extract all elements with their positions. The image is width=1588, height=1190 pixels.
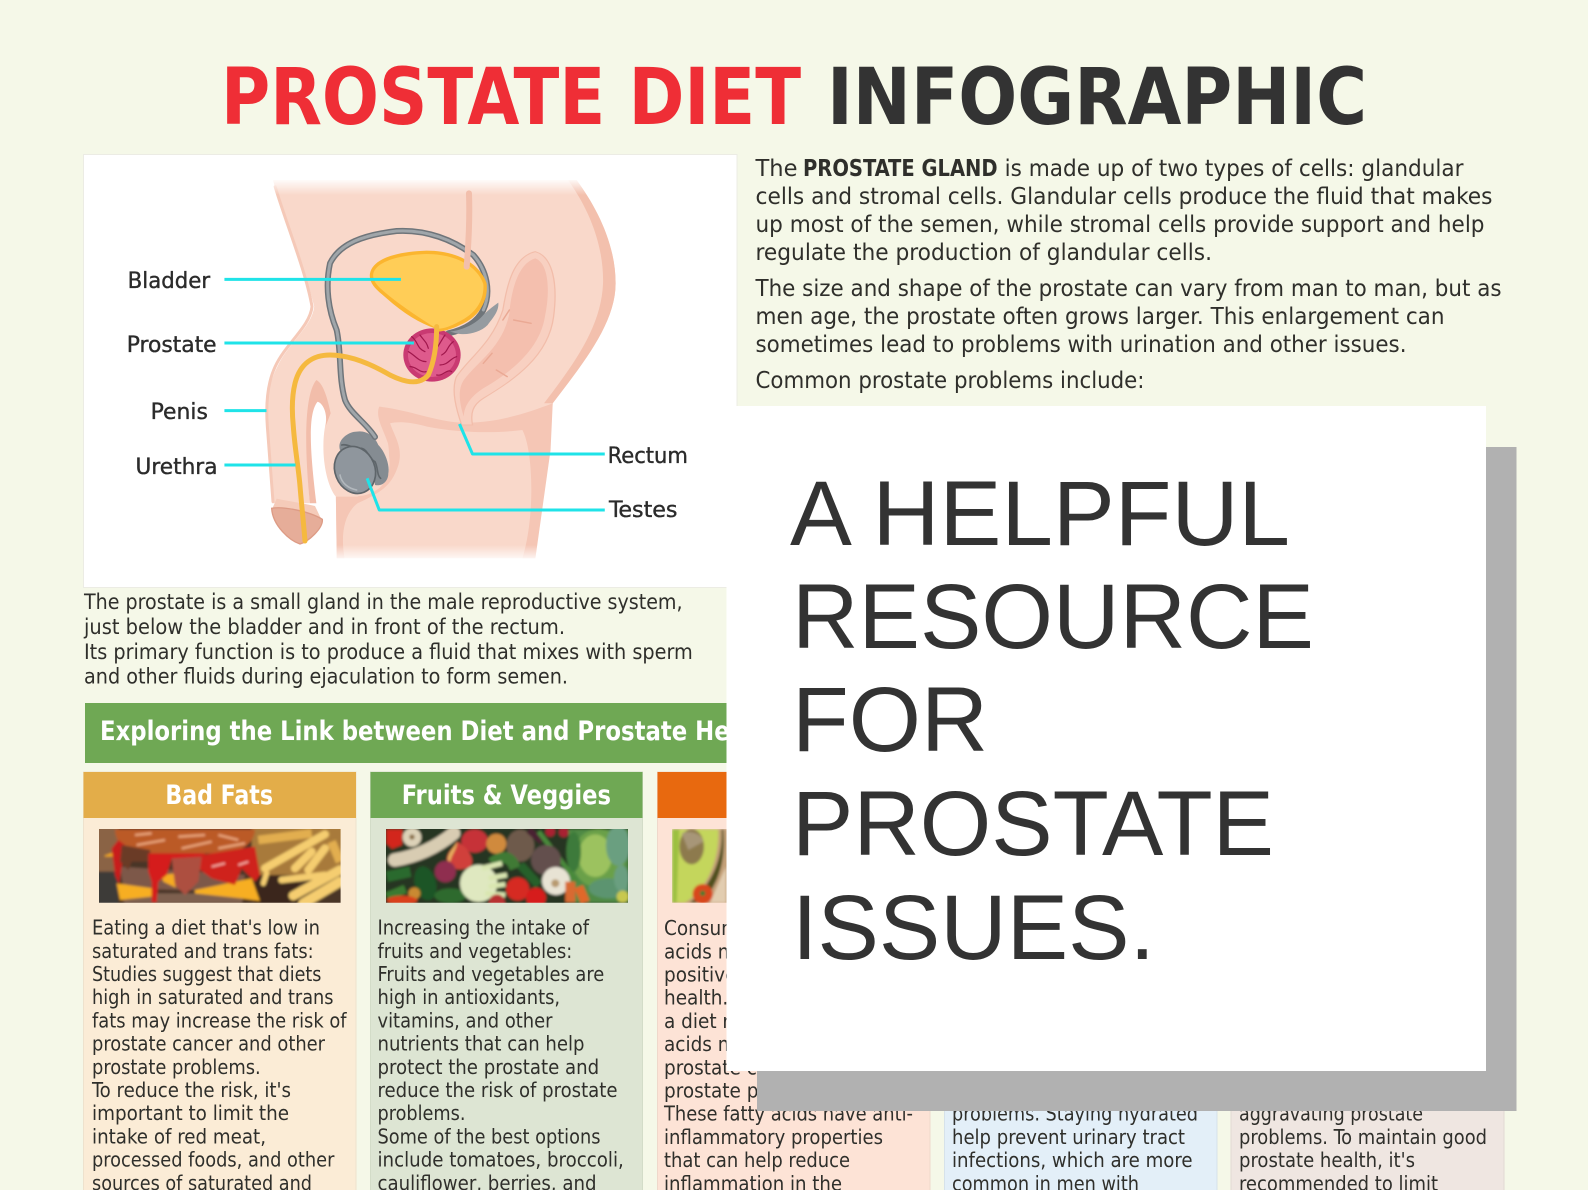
text: aggravating foods advice: aggravating prostate: [1239, 1102, 1423, 1126]
text: fatty acids advice: inflammatory properties: [664, 1125, 883, 1149]
text: bad fats advice: saturated and trans fats:: [92, 939, 314, 963]
text: fatty acids advice: These fatty acids have anti-: [663, 1102, 913, 1126]
labels: Urethra: [136, 455, 218, 480]
text block: prostate gland details: Common prostate problems include:: [756, 368, 1144, 394]
text: hydration advice: infections, which are more: [952, 1148, 1193, 1172]
text: bad fats advice: prostate cancer and other: [92, 1032, 325, 1056]
text: bad fats advice: processed foods, and other: [92, 1148, 335, 1172]
overlay card: helpful resource headline: [726, 406, 1486, 1071]
title: [221, 53, 1367, 143]
text: fatty acids advice: health.: [664, 986, 728, 1010]
overlay card: helpful resource headline: RESOURCE: [792, 566, 1314, 668]
panel: aggravating foods: [1231, 1000, 1504, 1190]
panel: anatomy diagram: [84, 154, 737, 588]
text block: prostate description: The prostate is a small gland in the male reproductive system,: [83, 590, 683, 615]
text: hydration advice: problems. Staying hydrated: [952, 1102, 1198, 1126]
panel: bad fats: Bad Fats: [165, 780, 273, 811]
text: fruits and vegetables advice: include tomatoes, broccoli,: [378, 1148, 624, 1172]
text: fruits and vegetables advice: reduce the risk of prostate: [378, 1078, 618, 1102]
panel: fruits and veggies: Fruits & Veggies: [402, 780, 611, 811]
image: burger and fries: [99, 829, 341, 903]
image: avocado and bread: [672, 829, 726, 903]
text: fatty acids advice: [663, 916, 913, 1190]
illustration: male reproductive anatomy: [266, 178, 616, 562]
text block: prostate gland details: up most of the semen, while stromal cells provide support and help: [756, 212, 1484, 238]
text: fruits and vegetables advice: problems.: [378, 1101, 466, 1125]
overlay card: helpful resource headline: A HELPFUL: [790, 463, 1290, 565]
panel: bad fats: [84, 772, 356, 1190]
text: bad fats advice: intake of red meat,: [92, 1124, 266, 1148]
text: fruits and vegetables advice: fruits and vegetables:: [378, 939, 572, 963]
text: bad fats advice: Eating a diet that's low in: [92, 915, 320, 939]
text: bad fats advice: important to limit the: [92, 1101, 289, 1125]
text: fruits and vegetables advice: Increasing the intake of: [378, 915, 590, 939]
text: aggravating foods advice: prostate health, it's: [1239, 1148, 1415, 1172]
text: bad fats advice: high in saturated and trans: [92, 985, 334, 1009]
title: PROSTATE DIET: [221, 53, 801, 143]
bladder, prostate and ducts: [292, 193, 498, 541]
text: bad fats advice: prostate problems.: [92, 1055, 261, 1079]
labels: Prostate: [127, 333, 217, 358]
text block: prostate gland details: is made up of two types of cells: glandular: [1005, 156, 1464, 182]
text: bad fats advice: fats may increase the risk of: [92, 1008, 347, 1032]
overlay card: helpful resource headline: ISSUES.: [792, 877, 1155, 979]
text: fruits and vegetables advice: Some of the best options: [378, 1124, 600, 1148]
text: aggravating foods advice: [1239, 1102, 1487, 1190]
penis tip and testis: [272, 430, 390, 544]
text: aggravating foods advice: problems. To maintain good: [1239, 1125, 1487, 1149]
labels: Testes: [608, 498, 678, 523]
text: fatty acids advice: acids may: [664, 1032, 758, 1056]
text: fruits and vegetables advice: nutrients that can help: [378, 1032, 584, 1056]
labels: Penis: [151, 400, 208, 425]
text: fatty acids advice: that can help reduce: [664, 1148, 850, 1172]
text block: prostate gland details: cells and stromal cells. Glandular cells produce the fluid that makes: [756, 184, 1492, 210]
panel: healthy fats: [658, 772, 930, 1190]
text: bad fats advice: [91, 915, 347, 1190]
text: fatty acids advice: prostate p: [664, 1078, 758, 1102]
text: fatty acids advice: prostate c: [664, 1055, 757, 1079]
text: fatty acids advice: Consuming: [664, 916, 768, 940]
text block: prostate description: and other fluids during ejaculation to form semen.: [84, 664, 568, 690]
text: fruits and vegetables advice: Fruits and vegetables are: [378, 962, 604, 986]
labels: [127, 269, 688, 523]
text block: prostate gland details: PROSTATE GLAND: [803, 156, 998, 182]
text block: prostate description: [83, 590, 693, 690]
text block: prostate gland details: sometimes lead to problems with urination and other issues.: [756, 332, 1406, 358]
text block: prostate gland details: men age, the prostate often grows larger. This enlargement can: [756, 304, 1444, 330]
overlay card: helpful resource headline: FOR: [792, 669, 988, 771]
text: bad fats advice: To reduce the risk, it's: [91, 1078, 291, 1102]
text block: prostate description: Its primary function is to produce a fluid that mixes with sperm: [84, 640, 693, 665]
image: mixed vegetables: [386, 829, 628, 903]
text: fruits and vegetables advice: high in antioxidants,: [378, 985, 560, 1009]
labels: Rectum: [608, 444, 688, 469]
banner: diet and prostate health: [85, 703, 1504, 763]
overlay shadow: [757, 447, 1516, 1111]
text: bad fats advice: Studies suggest that diets: [92, 962, 321, 986]
text: fruits and vegetables advice: vitamins, and other: [378, 1008, 553, 1032]
title: INFOGRAPHIC: [827, 53, 1367, 143]
text block: prostate gland details: The size and shape of the prostate can vary from man to man, but as: [754, 276, 1502, 302]
panel: hydration: [944, 1000, 1217, 1190]
text: fruits and vegetables advice: [378, 915, 624, 1190]
text block: prostate description: just below the bladder and in front of the rectum.: [83, 615, 565, 640]
text: fruits and vegetables advice: protect the prostate and: [378, 1055, 599, 1079]
text block: prostate gland details: regulate the production of glandular cells.: [756, 240, 1212, 266]
text: hydration advice: help prevent urinary tract: [952, 1125, 1185, 1149]
leader lines: [224, 279, 605, 510]
text block: prostate gland details: The: [754, 156, 798, 182]
banner: diet and prostate health: Exploring the Link between Diet and Prostate Health: [100, 716, 780, 747]
text: fatty acids advice: a diet rich: [664, 1009, 757, 1033]
text: fatty acids advice: positive: [664, 962, 736, 986]
text: fatty acids advice: acids may: [664, 939, 758, 963]
text: hydration advice: [952, 1102, 1198, 1190]
text block: prostate gland details: [754, 156, 1502, 394]
panel: fruits and veggies: [370, 772, 642, 1190]
labels: Bladder: [128, 269, 211, 294]
overlay card: helpful resource headline: PROSTATE: [792, 773, 1274, 875]
